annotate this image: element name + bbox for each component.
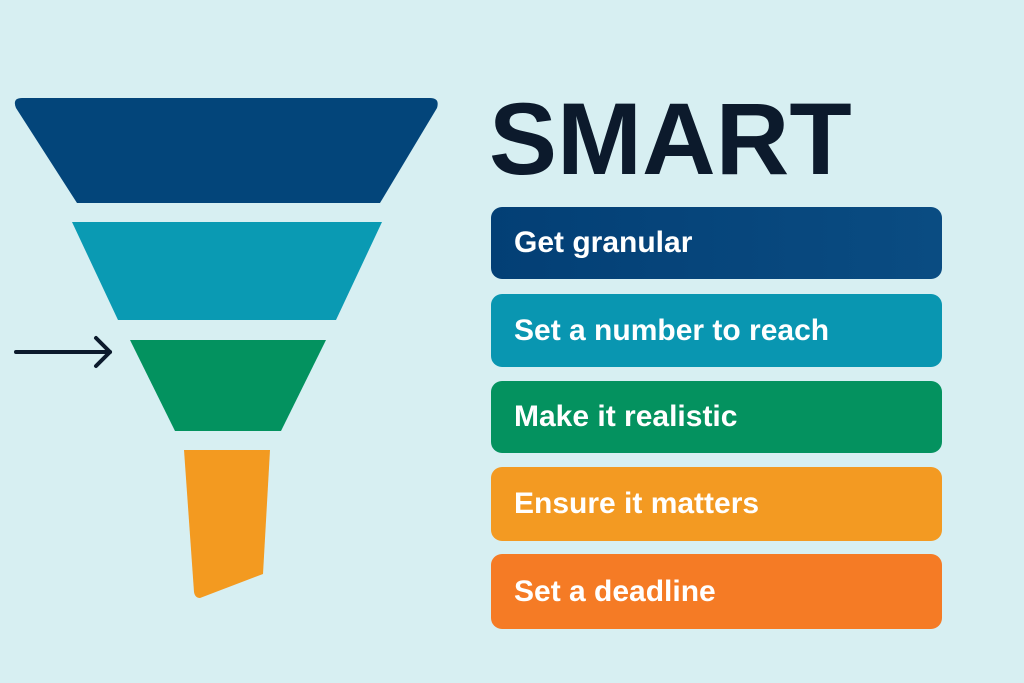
item: Get granular: Get granular [514, 226, 692, 259]
item: realistic: Make it realistic [514, 400, 737, 433]
funnel layer 3 [130, 340, 326, 431]
item: deadline: Set a deadline [514, 574, 716, 608]
item: realistic [491, 381, 942, 453]
title: SMART [489, 82, 852, 196]
funnel layer 4 [184, 450, 270, 598]
item: deadline [491, 554, 942, 629]
arrow [16, 338, 110, 366]
item: Get granular [491, 207, 942, 279]
item: Set a number: Set a number to reach [514, 314, 829, 346]
funnel layer 2 [72, 222, 382, 320]
funnel layer 1 [15, 98, 438, 203]
funnel [14, 98, 438, 598]
item: Set a number [491, 294, 942, 367]
item: matters: Ensure it matters [514, 487, 759, 520]
item: matters [491, 467, 942, 541]
